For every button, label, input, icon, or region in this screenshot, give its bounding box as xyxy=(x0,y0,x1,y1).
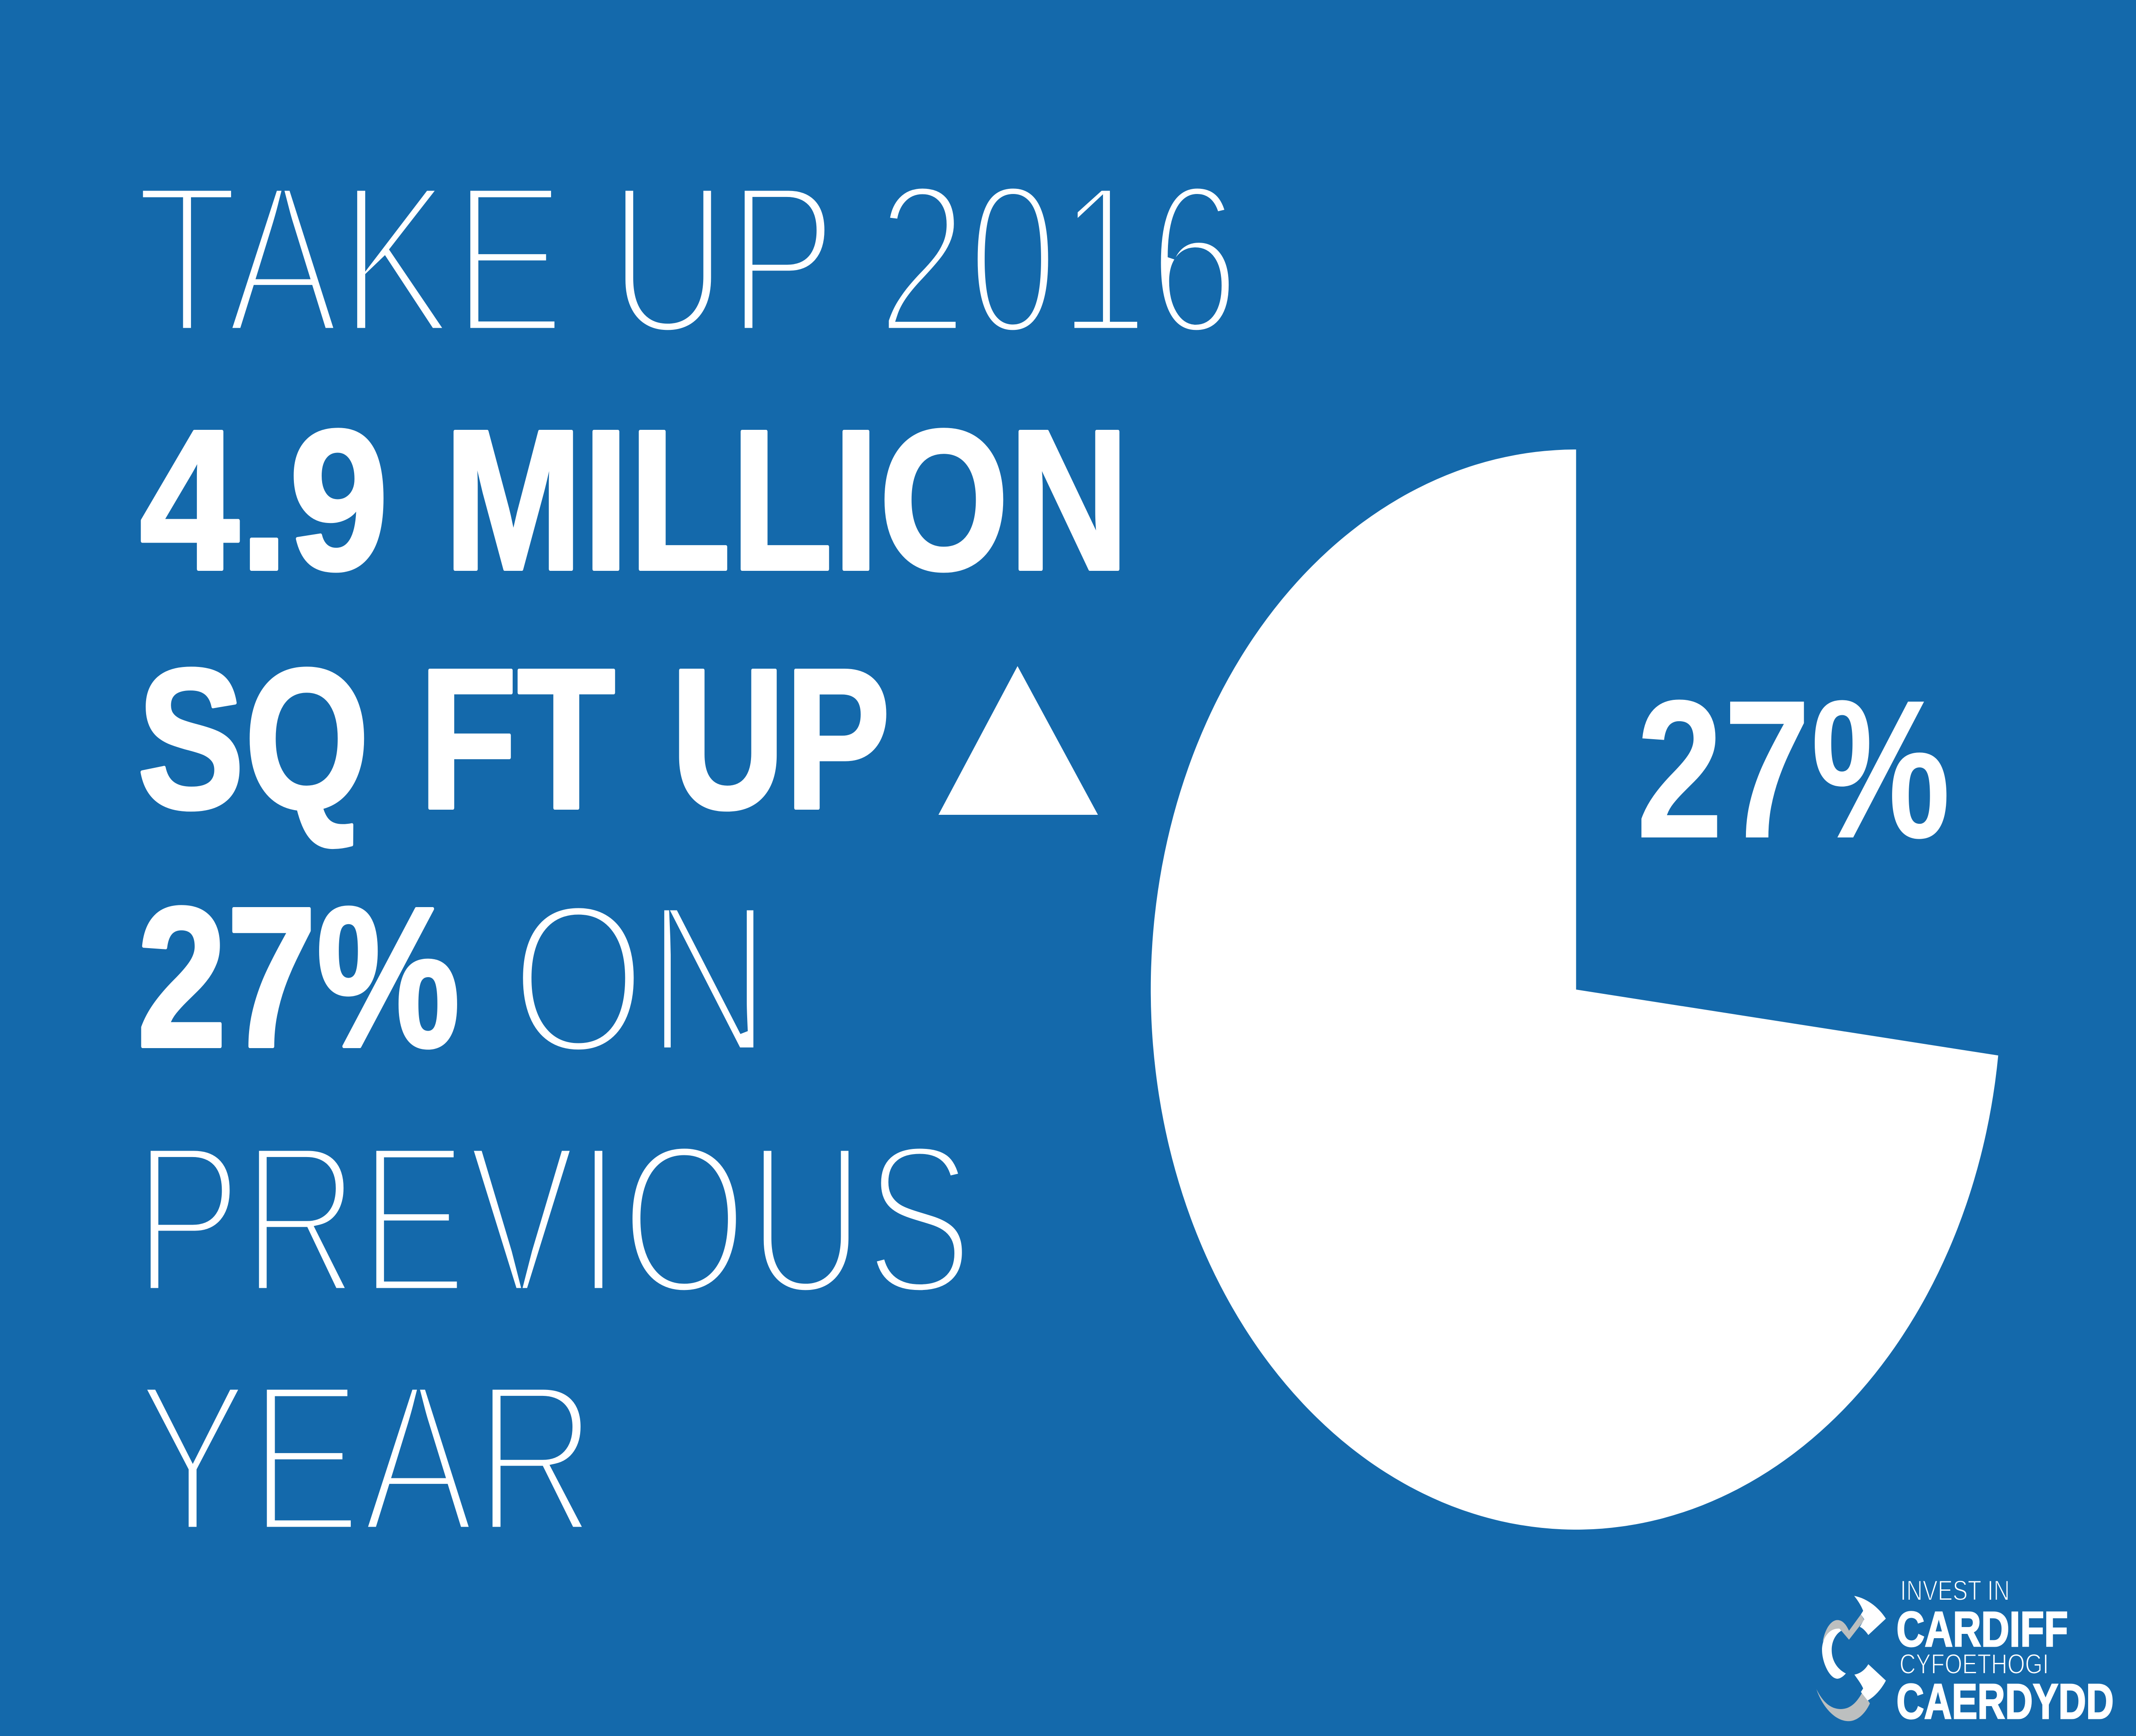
pie label: 27%: 27% xyxy=(1636,659,1951,880)
logo text: cyfoethogi: CYFOETHOGI xyxy=(1899,1648,2049,1680)
logo text: cardiff: CARDIFF xyxy=(1896,1602,2068,1657)
logo: invest in cardiff xyxy=(1816,1574,2114,1730)
logo text: caerdydd: CAERDYDD xyxy=(1896,1674,2114,1730)
line: 4.9 million: 4.9 xyxy=(140,389,389,612)
icon: up triangle xyxy=(939,666,1098,815)
logo mark xyxy=(1816,1596,1886,1721)
line: take up 2016: TAKE xyxy=(135,140,566,379)
line: 4.9 million xyxy=(140,389,1129,612)
pie chart xyxy=(1151,449,1998,1530)
line: 27% on xyxy=(137,860,772,1098)
line: take up 2016: UP xyxy=(609,140,837,379)
line: 27% on: ON xyxy=(511,860,772,1098)
line: year: YEAR xyxy=(136,1339,597,1577)
headline text block xyxy=(134,140,1240,1577)
line: take up 2016: 2016 xyxy=(877,140,1240,379)
line: previous: PREVIOUS xyxy=(134,1100,973,1339)
line: 4.9 million: MILLION xyxy=(444,389,1129,612)
line: take up 2016 xyxy=(135,140,1240,379)
line: sq ft up: UP xyxy=(671,628,890,851)
logo text: invest in: INVEST IN xyxy=(1900,1574,2010,1606)
line: sq ft up xyxy=(137,628,890,851)
line: sq ft up: FT xyxy=(419,628,616,851)
pie: main slice xyxy=(1151,449,1998,1530)
line: 27% on: 27% xyxy=(137,866,460,1089)
line: sq ft up: SQ xyxy=(137,628,370,851)
